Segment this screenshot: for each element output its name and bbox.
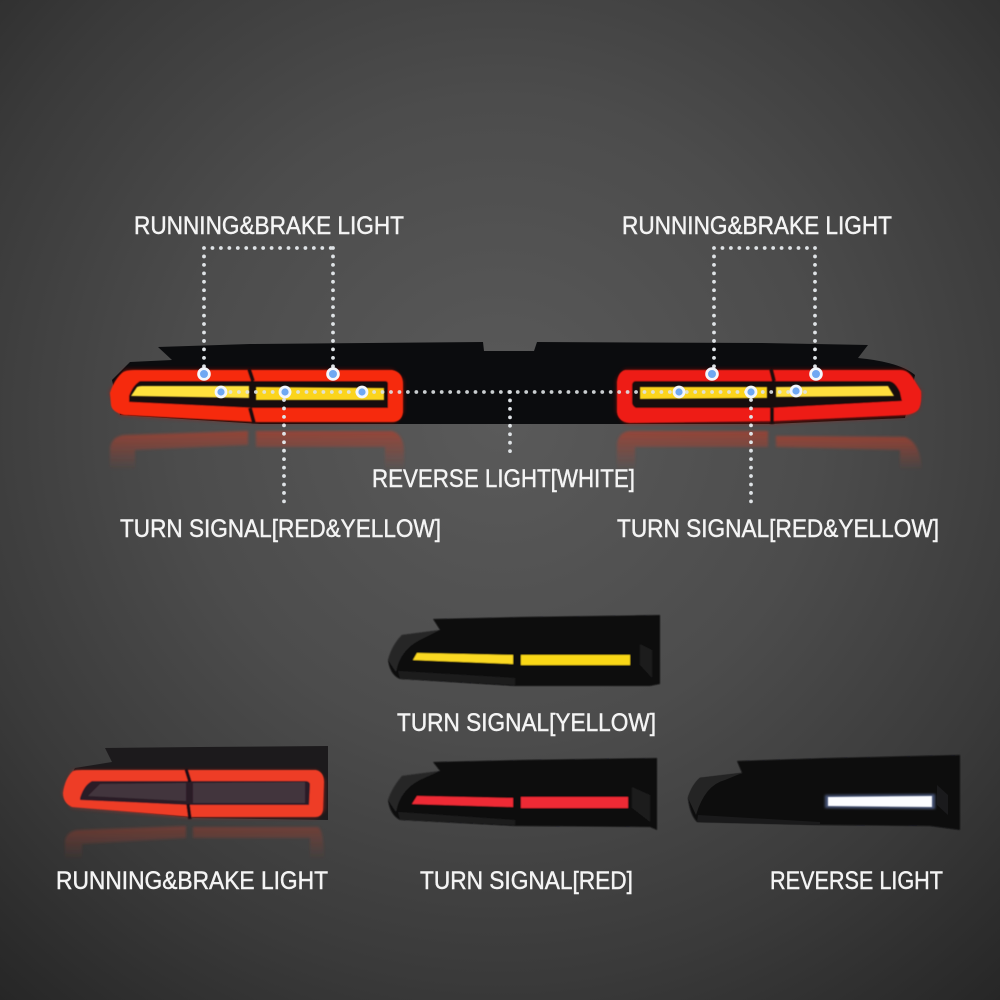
label: reverse light white: REVERSE LIGHT[WHITE] [372,465,635,493]
leader: right running and brake [714,248,815,370]
right lamp inner yellow bars [640,386,894,399]
lamp: turn signal red [388,758,657,830]
label: right turn signal: TURN SIGNAL[RED&YELLOW] [617,515,939,543]
leader: horizontal reverse link [222,390,808,394]
leader: reverse light [508,392,512,455]
main tail light assembly [110,342,922,470]
left lamp inner yellow bars [131,386,384,400]
right lamp red outline [617,369,921,424]
label: right running and brake light: RUNNING&BRAKE LIGHT [622,212,892,240]
red glow [110,370,921,423]
label: left running and brake light: RUNNING&BRAKE LIGHT [134,212,404,240]
lamp: reverse light [688,755,960,830]
label: running and brake light: RUNNING&BRAKE LIGHT [56,867,328,895]
reflection: running lamp [65,826,324,860]
lamp: turn signal yellow [388,615,660,686]
left lamp red outline [110,369,403,423]
blue marker dots [199,369,821,397]
black centre panel [112,342,915,424]
label: turn signal red: TURN SIGNAL[RED] [420,867,633,895]
dotted leader lines [204,248,815,508]
label: reverse light: REVERSE LIGHT [770,867,943,895]
reflection of tail lights [110,431,922,470]
lamp: running and brake [63,746,328,860]
leader: right turn signal [749,400,753,505]
label: left turn signal: TURN SIGNAL[RED&YELLOW] [120,515,441,543]
leader: left running and brake [204,248,333,370]
label: turn signal yellow: TURN SIGNAL[YELLOW] [397,709,656,737]
leader: left turn signal [282,400,286,508]
